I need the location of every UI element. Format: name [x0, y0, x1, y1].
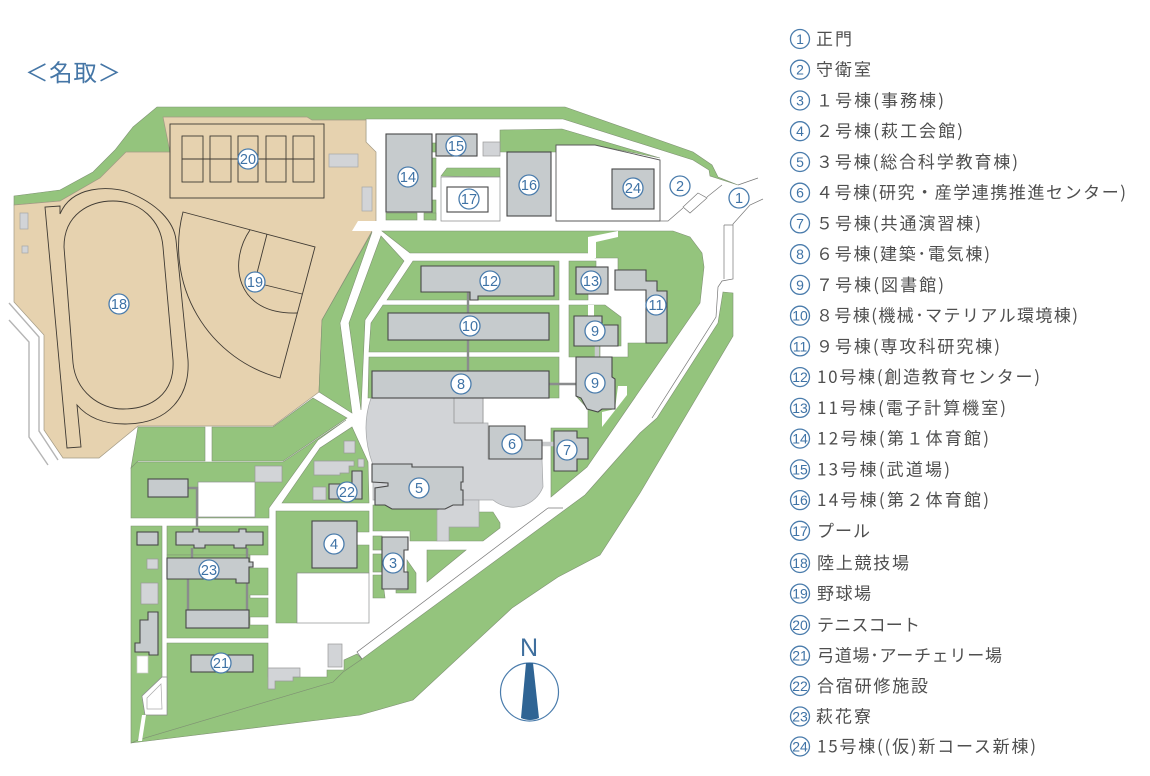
north compass — [500, 634, 558, 721]
building 23 middle — [167, 558, 253, 583]
marker 21 — [211, 653, 231, 673]
legend row 16: 16 — [792, 492, 808, 508]
marker 3: 3 — [389, 556, 397, 572]
building 11 — [615, 270, 667, 343]
legend row 22: 22 — [792, 678, 808, 694]
road entrance — [352, 221, 380, 231]
marker 10 — [460, 316, 480, 336]
building 13 — [576, 267, 608, 294]
building 10 — [388, 313, 549, 340]
buildings — [135, 134, 667, 672]
compass letter N: N — [520, 634, 538, 662]
marker 9 north — [585, 321, 605, 341]
marker 17 — [459, 189, 479, 209]
small field buildings — [20, 154, 372, 253]
marker 19: 19 — [247, 275, 263, 291]
marker 22 — [337, 482, 357, 502]
marker 23 — [199, 560, 219, 580]
legend row 2: 2 — [796, 62, 804, 78]
legend row 11: ９号棟(専攻科研究棟) — [816, 332, 1000, 357]
marker 18 — [109, 294, 129, 314]
building 8 — [372, 371, 549, 398]
legend row 12: 12 — [792, 369, 808, 385]
legend row 1 — [790, 25, 852, 50]
map number markers — [109, 136, 749, 673]
legend row 6: ４号棟(研究・産学連携推進センター) — [816, 179, 1126, 204]
marker 16: 16 — [521, 178, 537, 194]
legend row 24: 24 — [792, 738, 808, 754]
legend row 1: 正門 — [816, 25, 852, 50]
legend row 24: 15号棟((仮)新コース新棟) — [817, 732, 1036, 758]
legend row 19: 19 — [792, 586, 808, 602]
legend row 17: プール — [817, 517, 870, 542]
plots with white outline — [137, 145, 660, 741]
marker 24: 24 — [625, 181, 641, 197]
building 21 — [191, 655, 253, 672]
building 23 north — [176, 529, 263, 548]
legend row 11: 11 — [793, 338, 807, 354]
legend row 21: 21 — [792, 648, 808, 664]
legend row 12: 10号棟(創造教育センター) — [817, 363, 1040, 388]
north and west green strip — [14, 107, 738, 205]
west road edges — [9, 303, 58, 465]
marker 14: 14 — [400, 170, 416, 186]
marker 4: 4 — [330, 537, 338, 553]
marker 20: 20 — [240, 152, 256, 168]
title: campus name: ＜名取＞ — [25, 54, 121, 88]
legend row 10: 10 — [792, 308, 808, 324]
marker 1: 1 — [735, 191, 743, 207]
legend row 23: 萩花寮 — [816, 702, 871, 728]
legend row 9: ７号棟(図書館) — [816, 271, 944, 296]
legend row 9: 9 — [796, 277, 804, 293]
green plots — [131, 129, 660, 743]
west building — [148, 479, 188, 497]
building 16 — [507, 152, 551, 216]
baseball field — [179, 212, 315, 378]
main gate and gatehouse — [357, 178, 763, 659]
legend row 5: 5 — [796, 154, 804, 170]
legend row 23: 23 — [792, 708, 808, 724]
marker 21: 21 — [213, 656, 229, 672]
building 12 — [421, 266, 554, 300]
legend row 19 — [790, 580, 871, 605]
legend row 4: ２号棟(萩工会館) — [816, 117, 963, 142]
marker 6 — [502, 434, 522, 454]
legend row 15: 15 — [792, 461, 808, 477]
legend row 20: 20 — [792, 617, 808, 633]
legend row 15: 13号棟(武道場) — [817, 455, 950, 480]
marker 19 — [245, 272, 265, 292]
marker 20 — [238, 149, 258, 169]
building 14 — [386, 134, 432, 212]
sports ground — [14, 117, 376, 458]
compass needle — [521, 663, 539, 720]
legend row 13: 11号棟(電子計算機室) — [817, 394, 1006, 419]
light corridors — [542, 346, 597, 444]
marker 7: 7 — [563, 443, 571, 459]
legend row 6: 6 — [796, 185, 804, 201]
marker 12 — [480, 271, 500, 291]
marker 11 — [646, 295, 666, 315]
marker 8 — [451, 374, 471, 394]
south and east green band — [131, 292, 733, 743]
compass circle — [500, 663, 558, 721]
central plaza — [366, 398, 543, 507]
building 4 — [312, 521, 357, 568]
marker 17: 17 — [461, 192, 477, 208]
legend row 18: 陸上競技場 — [817, 549, 909, 574]
west wing building — [135, 612, 158, 655]
building 9 north — [574, 316, 618, 346]
legend row 2 — [790, 56, 871, 81]
marker 16 — [519, 175, 539, 195]
marker 13 — [581, 271, 601, 291]
pale outbuildings — [141, 142, 500, 689]
campus map — [9, 107, 763, 743]
legend row 10: ８号棟(機械･マテリアル環境棟) — [816, 302, 1078, 327]
building 23 south — [186, 610, 249, 628]
marker 22: 22 — [339, 485, 355, 501]
tennis courts — [170, 124, 324, 198]
legend row 13: 13 — [792, 400, 808, 416]
marker 12: 12 — [482, 274, 498, 290]
legend row 19: 野球場 — [817, 580, 871, 605]
marker 2 — [670, 176, 690, 196]
legend row 23 — [790, 702, 871, 728]
marker 3 — [383, 553, 403, 573]
marker 14 — [398, 167, 418, 187]
marker 2: 2 — [676, 179, 684, 195]
legend row 14: 12号棟(第１体育館) — [817, 425, 989, 450]
marker 15 — [446, 136, 466, 156]
building 24 — [612, 169, 654, 209]
building 3 — [382, 537, 408, 589]
plaza extension — [437, 500, 479, 541]
legend row 2: 守衛室 — [816, 56, 871, 81]
legend row 18: 18 — [792, 555, 808, 571]
pool — [447, 187, 488, 212]
building 15 — [436, 134, 477, 156]
legend row 5: ３号棟(総合科学教育棟) — [816, 148, 1018, 173]
marker 8: 8 — [457, 377, 465, 393]
marker 6: 6 — [508, 437, 516, 453]
marker 5: 5 — [415, 481, 423, 497]
marker 24 — [623, 178, 643, 198]
south-west building — [137, 532, 158, 545]
marker 5 — [409, 478, 429, 498]
running track — [45, 189, 188, 448]
marker 11: 11 — [648, 298, 664, 314]
white connector paths — [588, 305, 594, 316]
legend row 7: 7 — [796, 215, 804, 231]
legend row 14: 14 — [792, 431, 808, 447]
legend row 17: 17 — [792, 523, 808, 539]
building 22 — [329, 471, 362, 499]
legend row 8: ６号棟(建築･電気棟) — [816, 240, 990, 265]
marker 10: 10 — [462, 319, 478, 335]
building 5 — [372, 464, 463, 509]
marker 7 — [557, 440, 577, 460]
legend row 7: ５号棟(共通演習棟) — [816, 209, 981, 234]
marker 9 south: 9 — [591, 376, 599, 392]
legend row 16: 14号棟(第２体育館) — [817, 486, 989, 511]
marker 15: 15 — [448, 139, 464, 155]
building 9 south — [576, 357, 615, 412]
legend row 22: 合宿研修施設 — [817, 672, 928, 697]
marker 13: 13 — [583, 274, 599, 290]
marker 23: 23 — [201, 563, 217, 579]
white paths in east green — [588, 231, 627, 427]
marker 9 south — [585, 373, 605, 393]
central and east green — [382, 231, 704, 497]
building 6 — [489, 426, 542, 459]
connecting corridors — [188, 292, 576, 610]
legend row 3: 3 — [796, 92, 804, 108]
legend row 20: テニスコート — [817, 611, 920, 636]
legend row 17 — [790, 517, 870, 542]
building 7 — [554, 431, 588, 471]
marker 18: 18 — [111, 297, 127, 313]
marker 9 north: 9 — [591, 324, 599, 340]
legend row 21: 弓道場･アーチェリー場 — [817, 642, 1002, 667]
legend row 1: 1 — [796, 31, 804, 47]
marker 1 — [729, 188, 749, 208]
legend — [790, 25, 1126, 758]
legend row 8: 8 — [796, 246, 804, 262]
legend row 4: 4 — [796, 123, 804, 139]
marker 4 — [324, 534, 344, 554]
legend row 3: １号棟(事務棟) — [816, 86, 944, 112]
